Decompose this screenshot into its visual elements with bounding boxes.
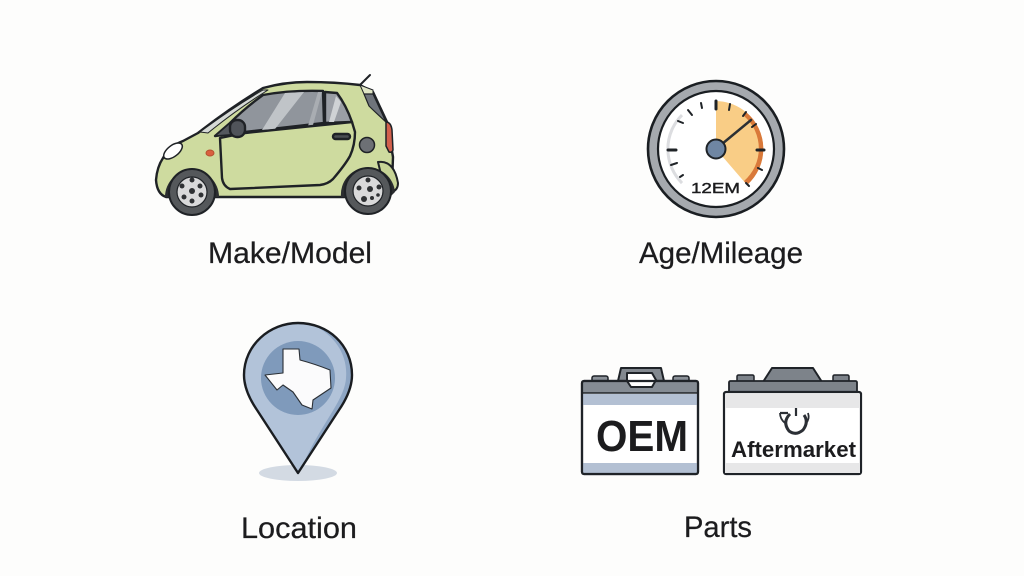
icon: rear wheel: [345, 168, 391, 214]
icon: Aftermarket battery: [724, 368, 861, 474]
icon: location pin with Texas: [244, 323, 352, 481]
gauge needle: [722, 120, 751, 144]
label: Age/Mileage: Age/Mileage: [639, 237, 803, 270]
icon: green car: [156, 75, 398, 215]
gauge caption: 12EM: [691, 180, 740, 197]
label: Parts: Parts: [684, 511, 752, 544]
icon: speedometer gauge: [648, 81, 784, 217]
label: Location: Location: [241, 512, 357, 545]
icon: horseshoe emblem: [780, 408, 809, 433]
OEM text: OEM: [596, 412, 688, 461]
icon: OEM battery: [582, 368, 698, 474]
label: Make/Model: Make/Model: [208, 237, 372, 270]
icon: front wheel: [169, 169, 215, 215]
Texas outline: [265, 349, 331, 409]
Aftermarket text: Aftermarket: [731, 437, 856, 462]
